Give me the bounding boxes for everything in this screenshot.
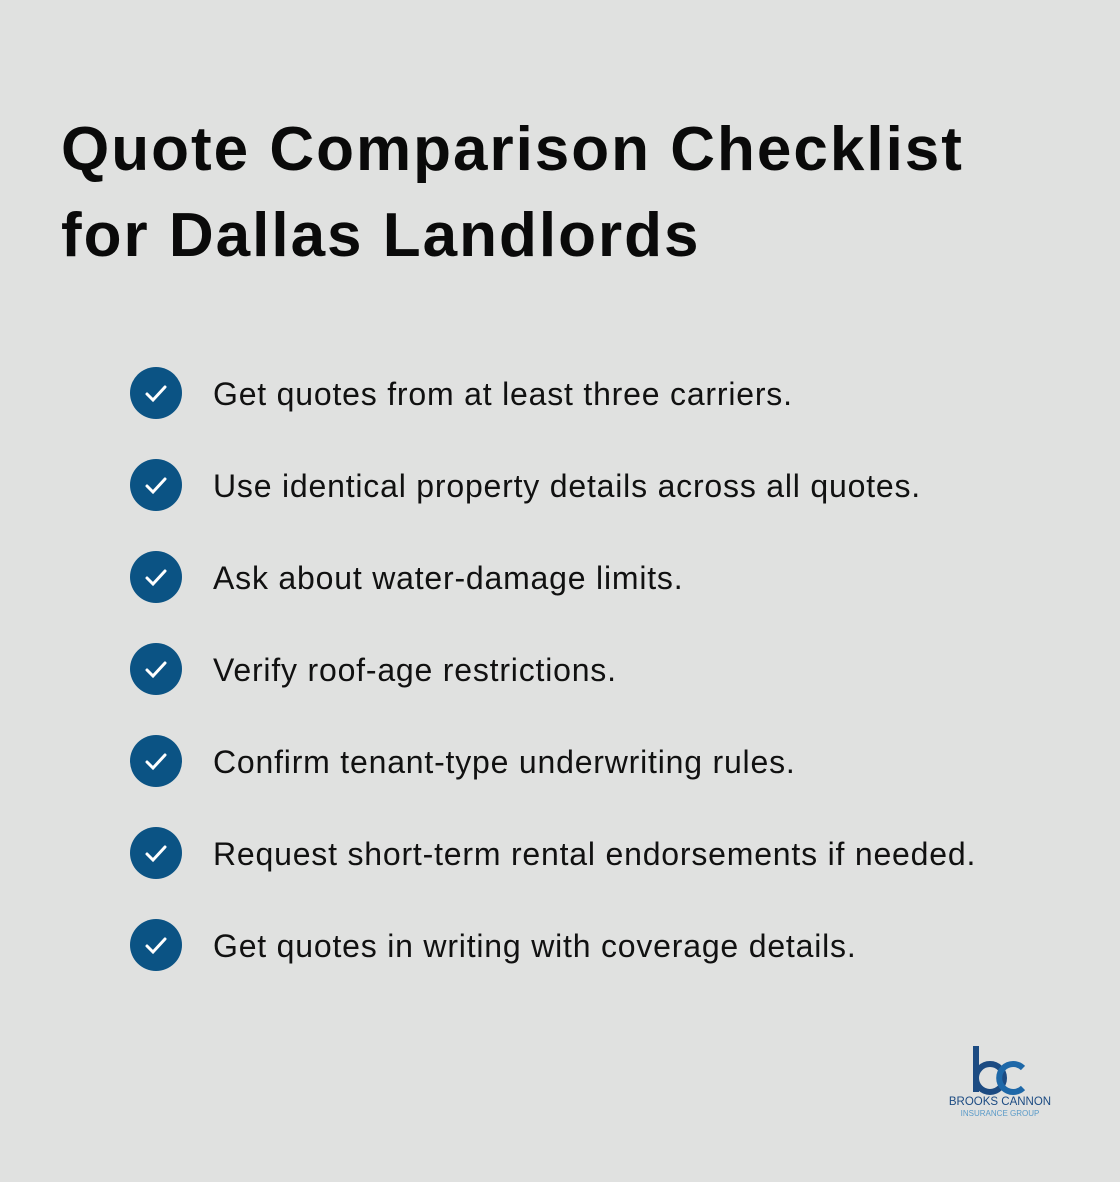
item 7: Get quotes in writing with coverage details.	[213, 928, 857, 964]
item 6: Request short-term rental endorsements if needed.	[213, 836, 976, 872]
item 5	[130, 735, 796, 787]
title	[61, 115, 964, 270]
item 1	[130, 367, 793, 419]
item 5: Confirm tenant-type underwriting rules.	[213, 744, 796, 780]
logo: INSURANCE GROUP	[961, 1109, 1039, 1118]
title: Quote Comparison Checklist	[61, 115, 964, 184]
item 6	[130, 827, 976, 879]
item 4	[130, 643, 617, 695]
item 2	[130, 459, 921, 511]
item 3	[130, 551, 683, 603]
item 4: Verify roof-age restrictions.	[213, 652, 617, 688]
logo	[949, 1046, 1051, 1118]
item 7	[130, 919, 857, 971]
item 1: Get quotes from at least three carriers.	[213, 376, 793, 412]
item 2: Use identical property details across all quotes.	[213, 468, 921, 504]
item 3: Ask about water-damage limits.	[213, 560, 683, 596]
logo: BROOKS CANNON	[949, 1096, 1051, 1108]
title: for Dallas Landlords	[61, 201, 700, 270]
